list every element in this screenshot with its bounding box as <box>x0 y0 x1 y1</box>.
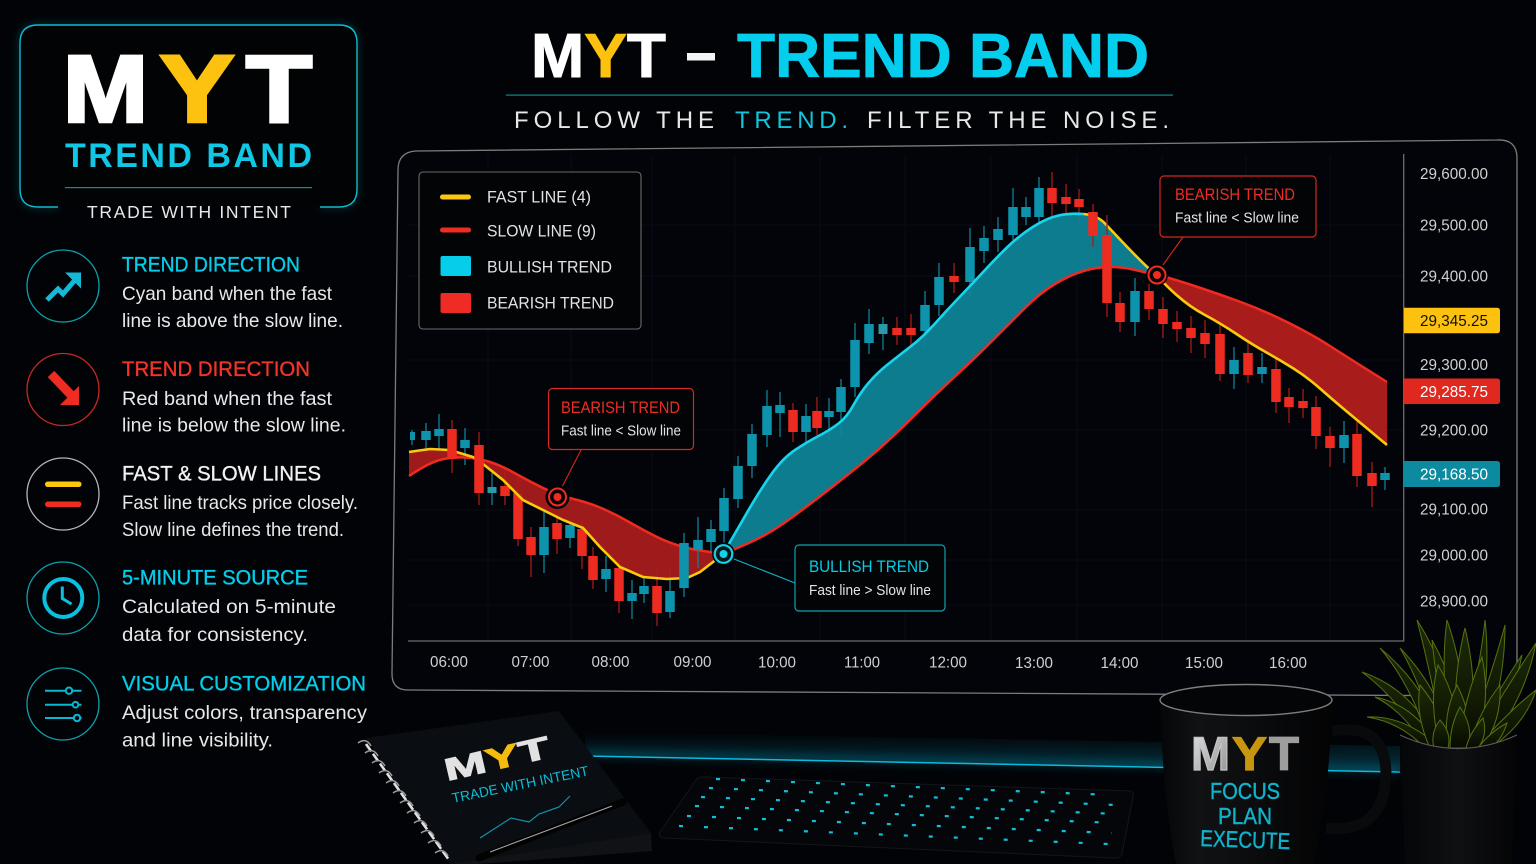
feature text: TREND DIRECTION <box>122 358 310 381</box>
logo wordmark MYT: T <box>246 36 312 142</box>
time axis labels: 07:00 <box>512 654 550 671</box>
notebook spiral <box>358 741 449 860</box>
time axis labels: 13:00 <box>1015 655 1053 672</box>
price axis labels: 29,100.00 <box>1420 502 1488 518</box>
candlesticks <box>412 172 1385 626</box>
mug <box>1160 684 1386 864</box>
price tag: yellow: 29,345.25 <box>1420 313 1488 330</box>
monitor frame <box>392 140 1517 696</box>
feature text: Red band when the fast <box>122 388 333 410</box>
fast line <box>409 214 1387 579</box>
bearish band right <box>1157 275 1387 445</box>
icon: sliders <box>27 668 99 740</box>
notebook tagline: TRADE WITH INTENT <box>450 762 590 806</box>
chart area <box>408 154 1500 672</box>
desk light glow <box>585 732 1400 772</box>
icon: clock <box>27 562 99 634</box>
title dash <box>687 53 715 60</box>
logo divider <box>65 187 312 188</box>
price axis labels: 29,300.00 <box>1420 357 1488 374</box>
feature text <box>122 462 358 541</box>
notebook <box>358 711 652 864</box>
clipped first candle <box>410 432 415 440</box>
feature text: Cyan band when the fast <box>122 283 333 305</box>
feature list <box>27 250 367 752</box>
mug logo: Y <box>1232 727 1267 780</box>
callout text: BEARISH TREND <box>1175 185 1295 204</box>
feature text: Fast line tracks price closely. <box>122 492 358 514</box>
bullish band <box>723 214 1157 554</box>
plant leaves <box>1362 620 1536 748</box>
callout text <box>561 398 681 440</box>
teal wicks <box>412 177 1385 619</box>
main title <box>506 22 1173 134</box>
callout: bearish left <box>546 388 694 509</box>
marker <box>712 542 735 566</box>
time axis labels <box>430 654 1307 672</box>
callout: bullish <box>712 542 945 611</box>
tagline: TREND. <box>735 107 848 134</box>
legend box <box>419 172 641 329</box>
feature text: and line visibility. <box>122 730 273 752</box>
time axis labels: 09:00 <box>674 654 712 671</box>
feature: visual customization <box>27 668 367 752</box>
title cyan text: TREND BAND <box>737 22 1149 91</box>
feature: trend direction bearish <box>27 354 346 436</box>
mug handle <box>1326 730 1386 829</box>
feature: 5-minute source <box>27 562 336 646</box>
muted teal bodies <box>492 324 883 493</box>
mug rim <box>1160 684 1332 716</box>
feature text: Slow line defines the trend. <box>122 519 344 541</box>
legend <box>419 172 641 329</box>
price axis labels: 29,400.00 <box>1420 268 1488 286</box>
callout text: BEARISH TREND <box>561 398 680 417</box>
tagline: FOLLOW THE <box>514 107 714 134</box>
connector <box>1163 237 1183 265</box>
feature text <box>122 358 346 436</box>
tagline: FILTER THE NOISE. <box>867 107 1169 134</box>
feature text: FAST & SLOW LINES <box>122 462 321 486</box>
logo subtitle: TREND BAND <box>65 137 312 175</box>
mug logo: M <box>1191 727 1230 780</box>
bearish band left <box>409 449 723 579</box>
foreground candles <box>452 204 1107 597</box>
red bodies <box>505 188 1372 613</box>
time axis labels: 10:00 <box>758 654 796 672</box>
legend: fast line: FAST LINE (4) <box>487 188 591 207</box>
callout text: Fast line > Slow line <box>809 583 931 599</box>
feature text <box>122 254 343 332</box>
time axis labels: 08:00 <box>592 654 630 671</box>
marker <box>1146 264 1168 286</box>
feature: fast and slow lines <box>27 458 358 541</box>
logo wordmark MYT <box>63 36 312 142</box>
icon: rising arrow <box>27 250 99 322</box>
price tag: teal: 29,168.50 <box>1420 466 1488 484</box>
callout box <box>1160 176 1316 237</box>
price tag: red <box>1404 378 1500 404</box>
mug slogan: EXECUTE <box>1200 825 1291 854</box>
time axis labels: 14:00 <box>1100 655 1139 672</box>
notebook pages <box>450 833 652 864</box>
logo frame <box>20 25 357 207</box>
price axis labels <box>1420 166 1488 610</box>
time axis labels: 11:00 <box>844 654 880 672</box>
callout text <box>809 557 931 599</box>
marker <box>546 485 570 509</box>
keyboard <box>659 777 1134 858</box>
title text: MYT <box>531 22 666 91</box>
chart grid <box>408 155 1403 640</box>
price axis labels: 29,200.00 <box>1420 422 1488 440</box>
callout text: Fast line < Slow line <box>561 424 681 440</box>
legend: slow line: SLOW LINE (9) <box>487 222 596 240</box>
legend: bullish trend <box>440 256 612 276</box>
callout text: BULLISH TREND <box>809 557 929 576</box>
time axis labels: 12:00 <box>929 654 967 672</box>
feature text: line is above the slow line. <box>122 310 343 332</box>
mug body <box>1160 700 1332 864</box>
feature text: Calculated on 5-minute <box>122 596 336 618</box>
mug slogan <box>1200 778 1291 854</box>
mug logo: T <box>1269 727 1299 780</box>
tagline <box>514 107 1169 134</box>
mug slogan: FOCUS <box>1210 778 1280 804</box>
logo frame glow <box>20 25 357 207</box>
chart axes <box>408 154 1404 641</box>
price axis labels: 29,000.00 <box>1420 548 1488 564</box>
teal bodies <box>426 188 1385 612</box>
callout box <box>795 545 945 611</box>
pen <box>479 802 623 858</box>
callout text <box>1175 185 1299 227</box>
feature text: TREND DIRECTION <box>122 254 300 276</box>
price axis labels: 29,500.00 <box>1420 218 1488 234</box>
plant pot <box>1400 735 1517 864</box>
red wicks <box>505 172 1372 626</box>
callout: bearish right <box>1146 176 1316 286</box>
time axis labels: 16:00 <box>1269 655 1307 672</box>
feature text: Adjust colors, transparency <box>122 702 367 724</box>
legend: bullish trend: BULLISH TREND <box>487 258 612 276</box>
feature text: VISUAL CUSTOMIZATION <box>122 672 366 696</box>
feature text <box>122 566 336 646</box>
logo card <box>20 25 357 222</box>
price axis labels: 28,900.00 <box>1420 594 1488 610</box>
notebook cover <box>366 711 651 864</box>
mug logo <box>1191 727 1299 780</box>
connector <box>734 559 795 583</box>
legend: slow line <box>440 222 596 240</box>
logo tagline: TRADE WITH INTENT <box>87 202 291 222</box>
notebook logo: M YT <box>441 730 553 788</box>
key backlights <box>679 779 1118 844</box>
callout text: Fast line < Slow line <box>1175 211 1299 227</box>
icon: two lines <box>27 458 99 530</box>
mug slogan: PLAN <box>1218 803 1272 829</box>
slow line <box>409 267 1387 554</box>
logo wordmark MYT: M <box>63 36 148 142</box>
notebook sparkline <box>480 796 570 838</box>
price tag: teal <box>1404 461 1500 487</box>
price tag: yellow <box>1404 308 1500 333</box>
callout box <box>548 388 694 450</box>
price tag: red: 29,285.75 <box>1420 384 1488 401</box>
logo wordmark MYT: Y <box>160 36 234 142</box>
keyboard body <box>659 777 1134 858</box>
legend: bearish trend: BEARISH TREND <box>487 294 614 312</box>
legend: bearish trend <box>440 293 614 313</box>
feature text: 5-MINUTE SOURCE <box>122 566 308 590</box>
time axis labels: 15:00 <box>1185 655 1223 672</box>
title rule <box>506 94 1173 96</box>
feature text: data for consistency. <box>122 624 308 646</box>
feature text <box>122 672 367 752</box>
feature text: line is below the slow line. <box>122 414 346 436</box>
legend: fast line <box>440 188 591 207</box>
price axis labels: 29,600.00 <box>1420 166 1488 183</box>
icon: falling arrow <box>27 354 99 426</box>
feature: trend direction bullish <box>27 250 343 332</box>
connector <box>562 450 581 487</box>
plant <box>1362 620 1536 864</box>
time axis labels: 06:00 <box>430 654 468 671</box>
